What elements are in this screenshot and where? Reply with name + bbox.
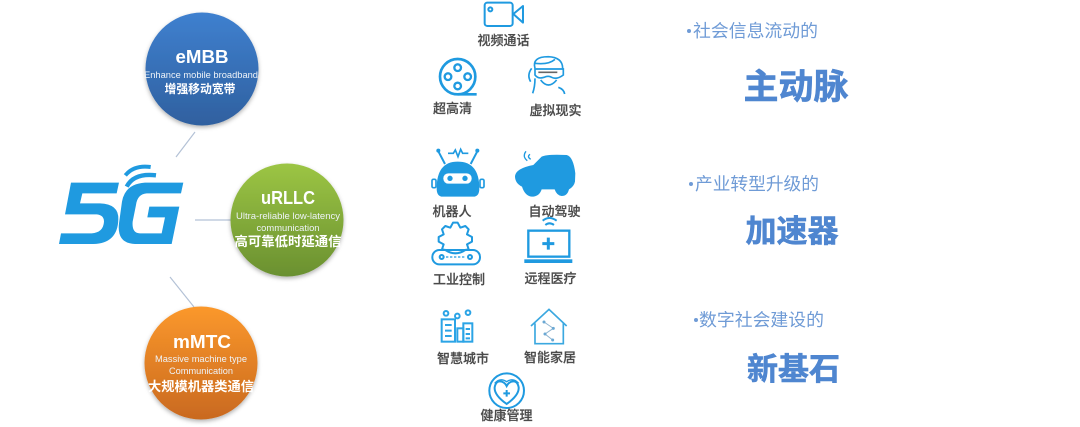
text block: digital society: [694, 310, 840, 387]
text block: industrial upgrade: [689, 174, 838, 249]
panel: eMBB circle: 增强移动宽带: [164, 81, 236, 96]
icon: ultra HD film reel: [440, 59, 477, 94]
icon: video call: [485, 3, 523, 26]
text block: social information flow: 主动脉: [743, 68, 849, 107]
panel: eMBB circle: [144, 12, 258, 126]
text block: digital society: 数字社会建设的: [699, 310, 824, 330]
label: health management: 健康管理: [480, 408, 533, 423]
label: robot: 机器人: [432, 204, 472, 219]
label: smart home: 智能家居: [524, 350, 576, 365]
panel: mMTC circle: 大规模机器类通信: [148, 379, 254, 394]
text block: industrial upgrade: 加速器: [746, 214, 838, 249]
icon: remote medical laptop: [524, 218, 572, 263]
connector lines: [170, 132, 231, 307]
text block: industrial upgrade: 产业转型升级的: [695, 174, 819, 194]
label: video call: 视频通话: [477, 33, 530, 48]
icon: virtual reality headset: [529, 57, 565, 94]
panel: uRLLC circle: communication: [256, 223, 320, 234]
panel: uRLLC circle: 高可靠低时延通信: [234, 234, 342, 249]
text block: social information flow: [687, 21, 849, 107]
panel: mMTC circle: [144, 306, 258, 420]
label: virtual reality: 虚拟现实: [529, 103, 582, 118]
panel: uRLLC circle: [230, 164, 344, 276]
panel: mMTC circle: mMTC: [173, 332, 231, 352]
label: industrial control: 工业控制: [433, 272, 485, 287]
label: autonomous driving: 自动驾驶: [528, 204, 581, 219]
text block: social information flow: 社会信息流动的: [693, 21, 818, 41]
icon: smart city: [442, 310, 472, 342]
icon: industrial control gear on conveyor: [432, 223, 480, 264]
label: remote medicine: 远程医疗: [524, 271, 577, 286]
panel: uRLLC circle: Ultra-reliable low-latency: [236, 211, 340, 222]
icon: health management heart: [489, 373, 524, 408]
icon: smart home: [531, 309, 567, 344]
panel: uRLLC circle: uRLLC: [261, 188, 315, 208]
panel: mMTC circle: Communication: [169, 366, 233, 377]
label: ultra HD: 超高清: [433, 101, 472, 116]
label: smart city: 智慧城市: [437, 351, 489, 366]
5G logo: [59, 167, 183, 244]
panel: mMTC circle: Massive machine type: [155, 354, 247, 365]
panel: eMBB circle: Enhance mobile broadband: [144, 70, 258, 81]
icon: robot: [432, 149, 484, 197]
icon: autonomous car: [515, 151, 575, 197]
panel: eMBB circle: eMBB: [176, 47, 228, 67]
text block: digital society: 新基石: [747, 352, 840, 387]
